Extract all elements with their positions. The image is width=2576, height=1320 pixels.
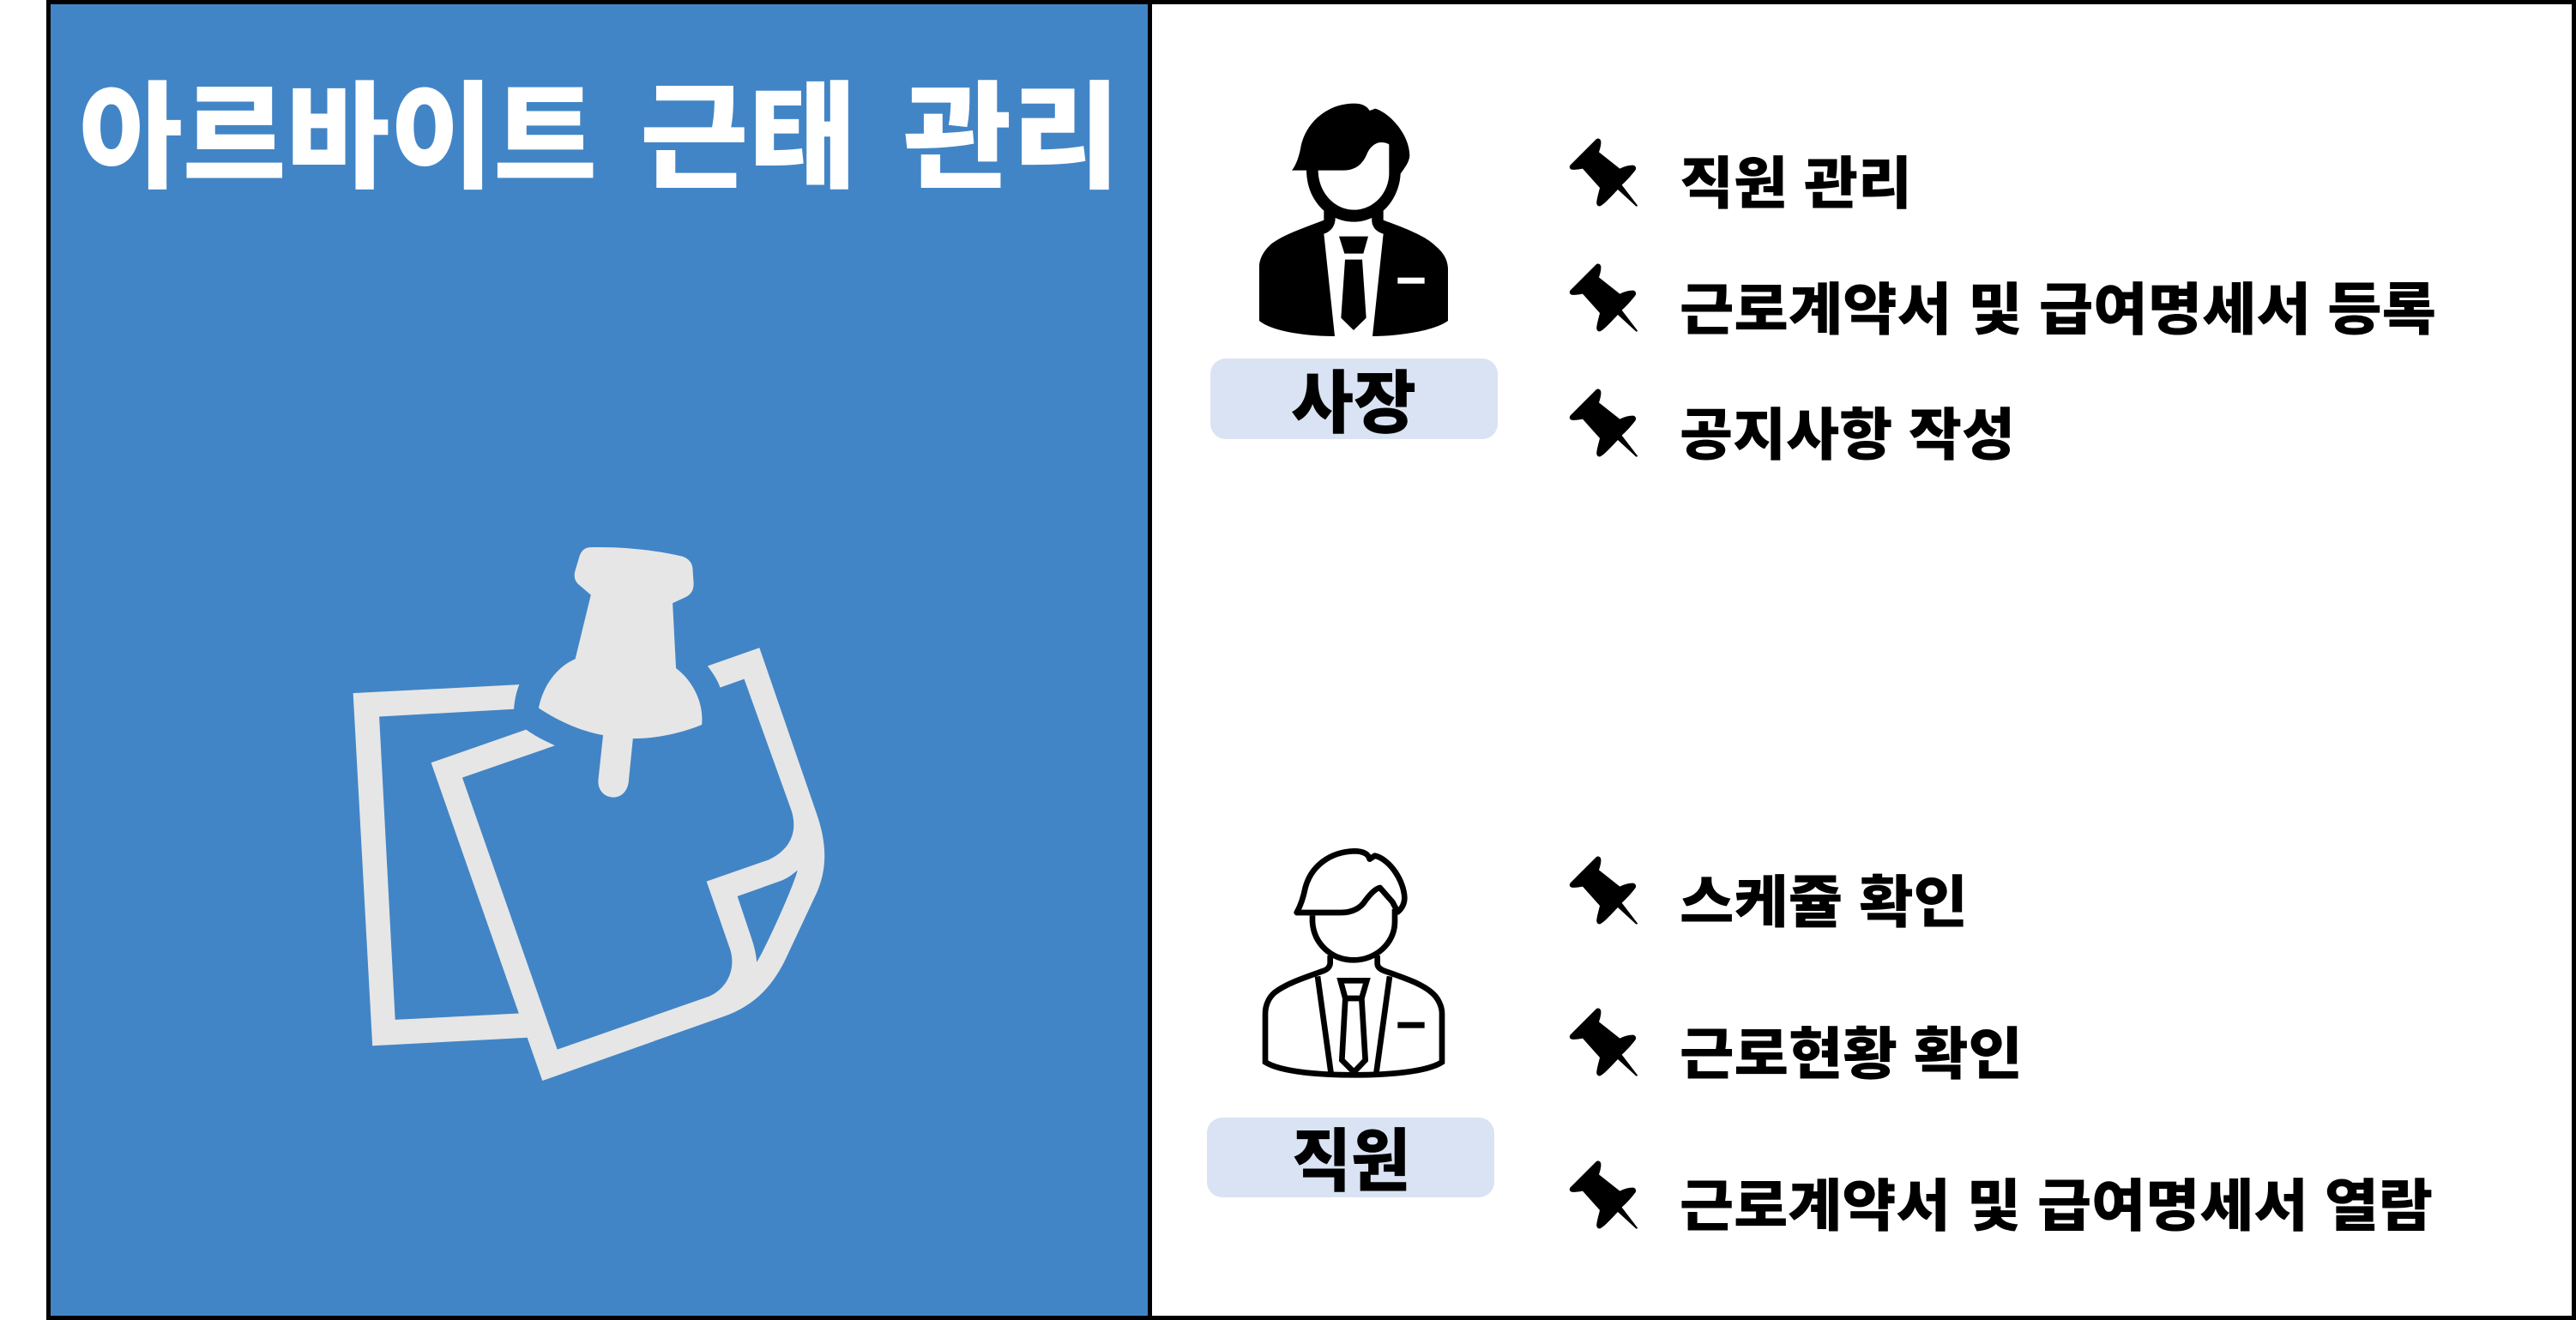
title: 아르바이트 — [79, 73, 597, 203]
panel: blue title panel — [51, 4, 1152, 1316]
label: employee — [1207, 1118, 1494, 1200]
pin 1 — [1570, 139, 1638, 207]
item: staff management: 직원 관리 — [1680, 152, 1912, 215]
icon: pinned sticky notes — [353, 547, 824, 1081]
label: boss: 사장 — [1291, 365, 1416, 442]
label: employee: 직원 — [1292, 1124, 1410, 1200]
pin 4 — [1570, 857, 1638, 925]
label: boss — [1210, 359, 1498, 442]
divider — [1148, 4, 1152, 1316]
item: write notices: 공지사항 작성 — [1680, 403, 2015, 467]
title: 근태 — [640, 73, 857, 203]
item: register contract and pay statement: 근로계약서 및 급여명세서 등록 — [1680, 278, 2436, 341]
item: view contract and pay statement: 근로계약서 및 급여명세서 열람 — [1680, 1174, 2433, 1238]
pin 3 — [1570, 389, 1638, 457]
icon: boss silhouette — [1259, 104, 1448, 336]
pin 5 — [1570, 1009, 1638, 1076]
title: 관리 — [903, 73, 1120, 203]
item: check schedule: 스케쥴 확인 — [1680, 871, 1968, 934]
pin 6 — [1570, 1161, 1638, 1229]
title — [79, 73, 1120, 203]
item: check work status: 근로현황 확인 — [1680, 1022, 2023, 1086]
icon: employee outline — [1265, 851, 1442, 1075]
pin 2 — [1570, 264, 1638, 332]
